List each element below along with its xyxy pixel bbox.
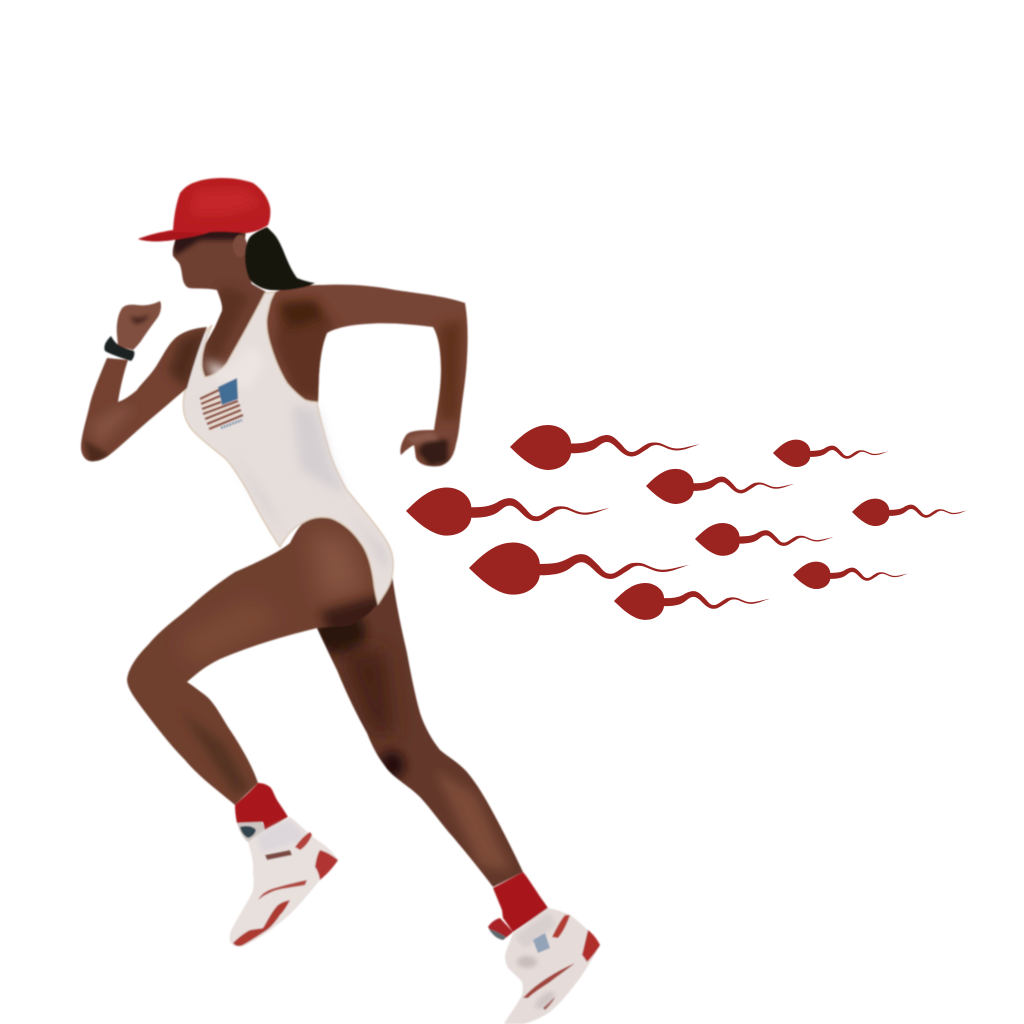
front sock <box>235 783 288 831</box>
far arm and chest skin <box>262 285 468 466</box>
red cap <box>138 178 270 241</box>
hair <box>245 227 315 290</box>
sperm swarm <box>406 425 968 620</box>
wristwatch <box>104 336 134 361</box>
flag on swimsuit <box>200 378 243 432</box>
rear leg <box>314 575 523 887</box>
sperm 1 <box>510 425 700 470</box>
sperm 9 <box>793 562 909 589</box>
sperm 5 <box>646 469 794 504</box>
sperm 2 <box>406 487 609 536</box>
white swimsuit <box>183 292 393 604</box>
front arm <box>81 327 207 465</box>
rear shoe <box>488 908 600 1024</box>
sperm 8 <box>852 499 968 526</box>
runner figure <box>81 178 600 1024</box>
rear sock <box>493 872 548 932</box>
front shoe <box>230 817 338 947</box>
illustration canvas <box>80 176 968 1024</box>
fist <box>117 301 161 350</box>
front leg <box>127 517 385 805</box>
sperm 6 <box>773 440 889 467</box>
sperm 7 <box>695 523 834 556</box>
sperm 4 <box>614 583 770 620</box>
sperm 3 <box>469 542 689 595</box>
neck and face <box>170 226 268 378</box>
ear <box>233 235 247 257</box>
